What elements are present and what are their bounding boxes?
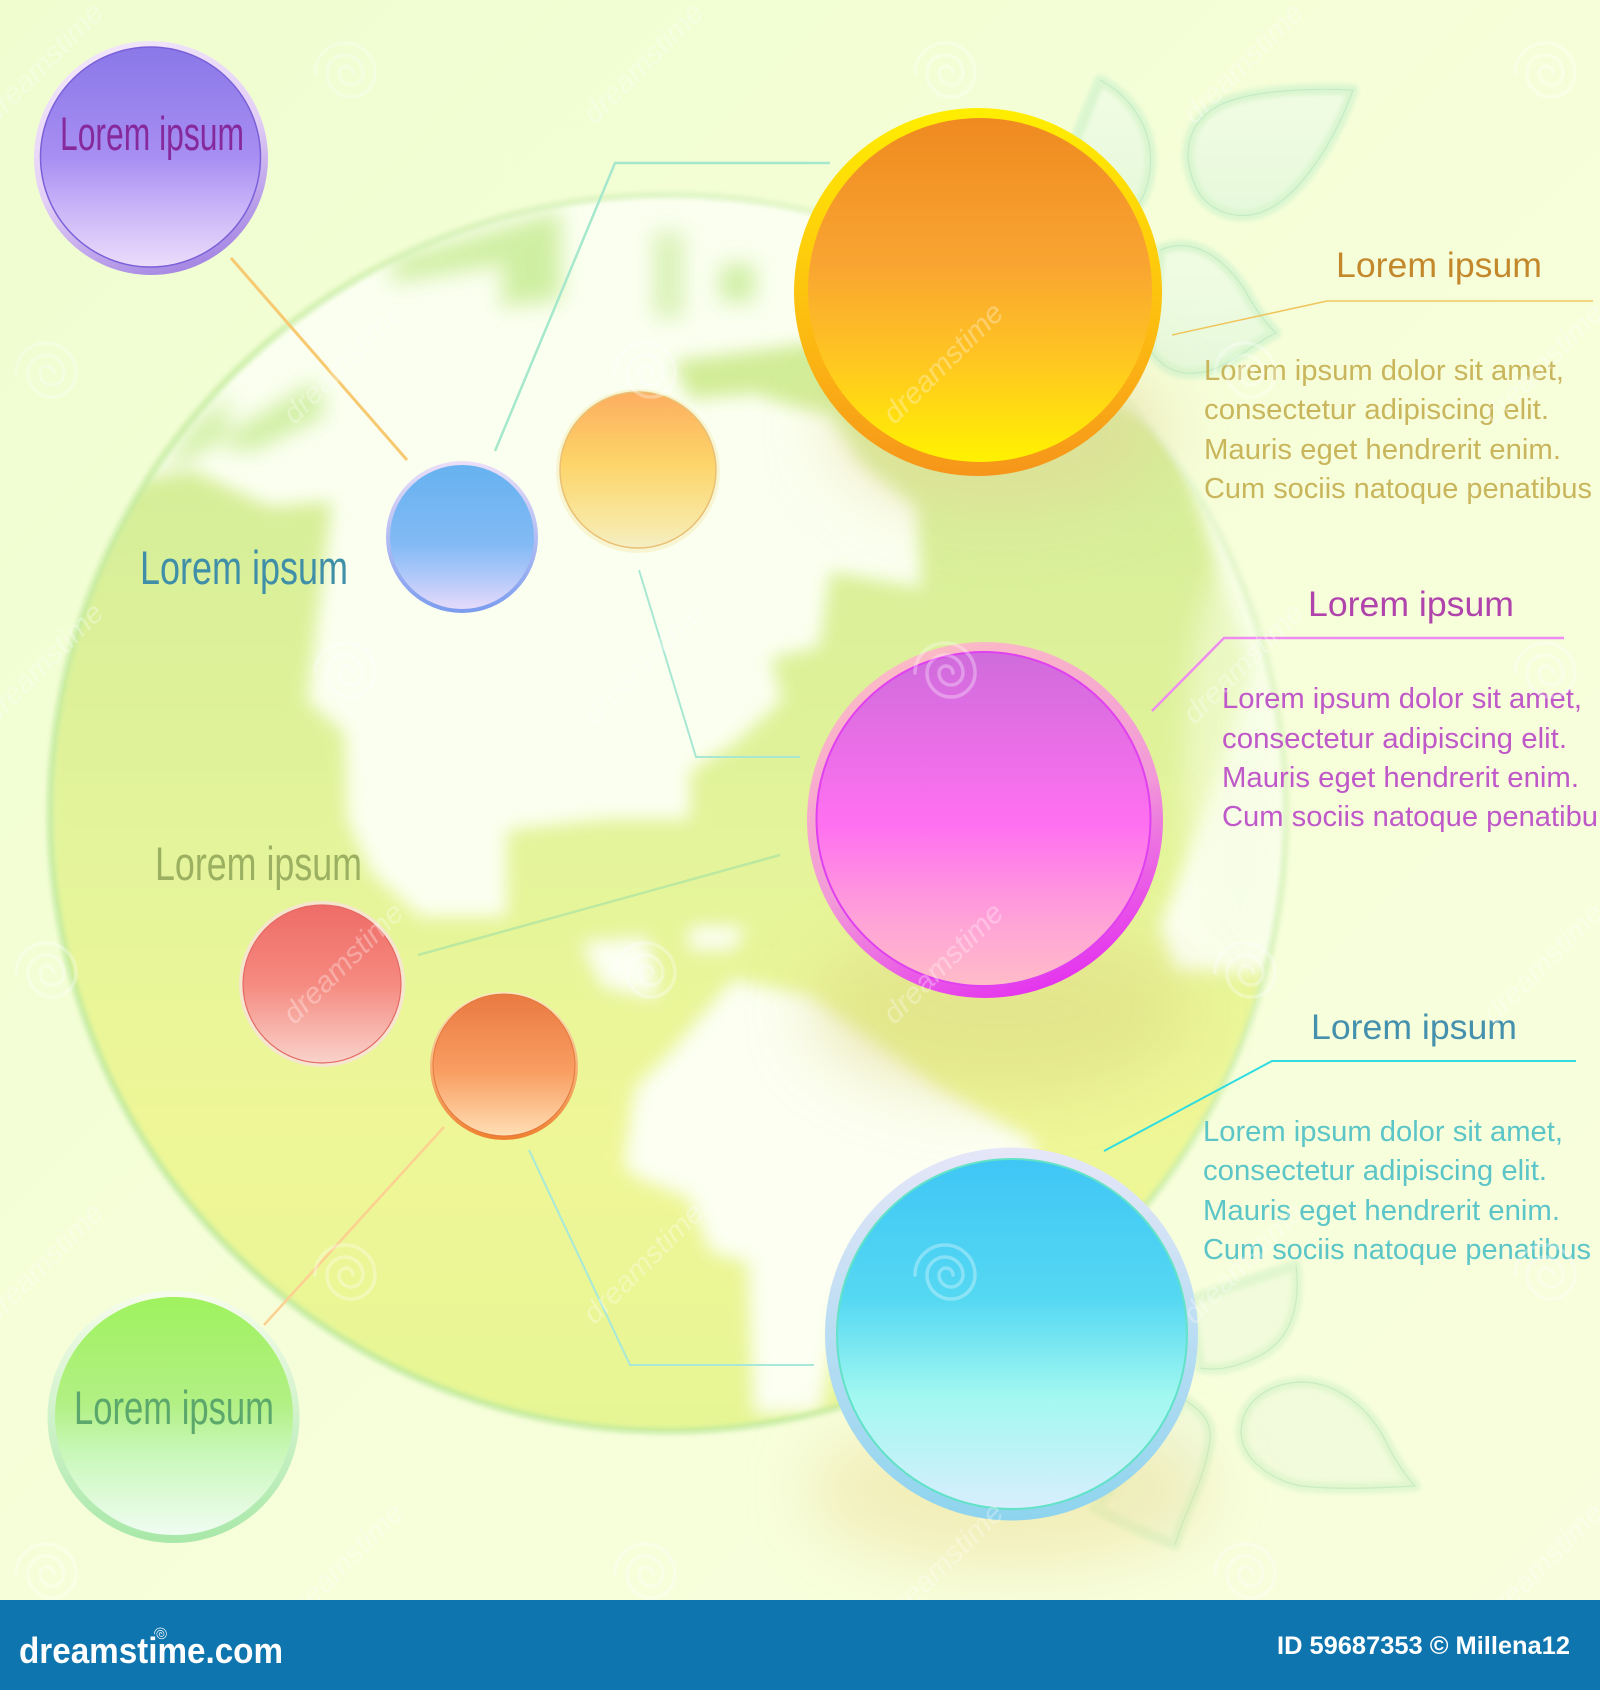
watermark text: dreamstime [876, 296, 1010, 430]
connector: blue to orange [495, 163, 830, 451]
text block: cyan: Mauris eget hendrerit enim. [1203, 1195, 1560, 1227]
right-side fade [1174, 566, 1280, 950]
connector: dark orange to green [264, 1127, 444, 1325]
leaves: lower cluster [1095, 1265, 1415, 1545]
text block: magenta: consectetur adipiscing elit. [1222, 723, 1567, 755]
connector: cyan to heading [1104, 1061, 1576, 1151]
connector: orange to heading [1172, 301, 1593, 335]
text block: orange: Lorem ipsum dolor sit amet, [1204, 355, 1564, 387]
connector: red to magenta [418, 855, 780, 955]
watermark text: dreamstime [1176, 1196, 1310, 1330]
watermark text: dreamstime [1176, 596, 1310, 730]
label: blue: Lorem ipsum [140, 541, 348, 594]
footer logo: dreamstime.com [19, 1630, 283, 1671]
circle: green [48, 1291, 300, 1543]
circle: red [239, 901, 405, 1067]
text block: cyan [1203, 1008, 1591, 1266]
heading: orange: Lorem ipsum [1336, 246, 1542, 285]
watermark text: dreamstime [1176, 0, 1310, 130]
watermark text: dreamstime [276, 1496, 410, 1630]
text block: orange: consectetur adipiscing elit. [1204, 394, 1549, 426]
watermark text: dreamstime [876, 1496, 1010, 1630]
heading: cyan: Lorem ipsum [1311, 1008, 1517, 1047]
heading: magenta: Lorem ipsum [1308, 585, 1514, 624]
circle: magenta [807, 642, 1163, 998]
label: green circle: Lorem ipsum [74, 1381, 274, 1434]
footer logo spiral icon [154, 1628, 166, 1639]
label: olive: Lorem ipsum [155, 837, 362, 890]
circle: purple [34, 41, 268, 275]
leaves: upper cluster [1075, 80, 1353, 373]
text block: magenta: Mauris eget hendrerit enim. [1222, 762, 1579, 794]
watermark text: dreamstime [276, 896, 410, 1030]
watermark text: dreamstime [576, 1196, 710, 1330]
globe [43, 195, 1348, 1509]
connector: magenta to heading [1152, 638, 1564, 711]
text block: magenta [1222, 585, 1598, 833]
connector: light orange to magenta [639, 570, 800, 757]
circle: orange [794, 108, 1162, 476]
text block: cyan: Cum sociis natoque penatibus [1203, 1234, 1591, 1266]
text block: orange: Mauris eget hendrerit enim. [1204, 434, 1561, 466]
text block: magenta: Cum sociis natoque penatibu [1222, 801, 1598, 833]
footer credit: ID 59687353 © Millena12 [1277, 1632, 1570, 1660]
circle: dark orange [430, 992, 578, 1140]
watermark text: dreamstime [876, 896, 1010, 1030]
watermark text: dreamstime [276, 296, 410, 430]
watermark text: dreamstime [576, 0, 710, 130]
connector: dark orange to cyan [529, 1150, 814, 1365]
text block: orange: Cum sociis natoque penatibus [1204, 473, 1592, 505]
globe rim [50, 195, 1286, 1431]
label: purple circle: Lorem ipsum [60, 107, 244, 160]
text block: magenta: Lorem ipsum dolor sit amet, [1222, 683, 1582, 715]
footer bar [0, 1600, 1600, 1690]
watermark text: dreamstime [576, 596, 710, 730]
land masses [50, 334, 1266, 1431]
text block: cyan: Lorem ipsum dolor sit amet, [1203, 1116, 1563, 1148]
text block: orange [1204, 246, 1592, 505]
circle: cyan [825, 1148, 1198, 1520]
soft circle shadows [810, 345, 1210, 1565]
circle: light orange [556, 389, 720, 553]
top land patches [162, 210, 755, 480]
connector: purple to blue [231, 258, 407, 460]
circle: blue [386, 461, 538, 613]
text block: cyan: consectetur adipiscing elit. [1203, 1155, 1547, 1187]
